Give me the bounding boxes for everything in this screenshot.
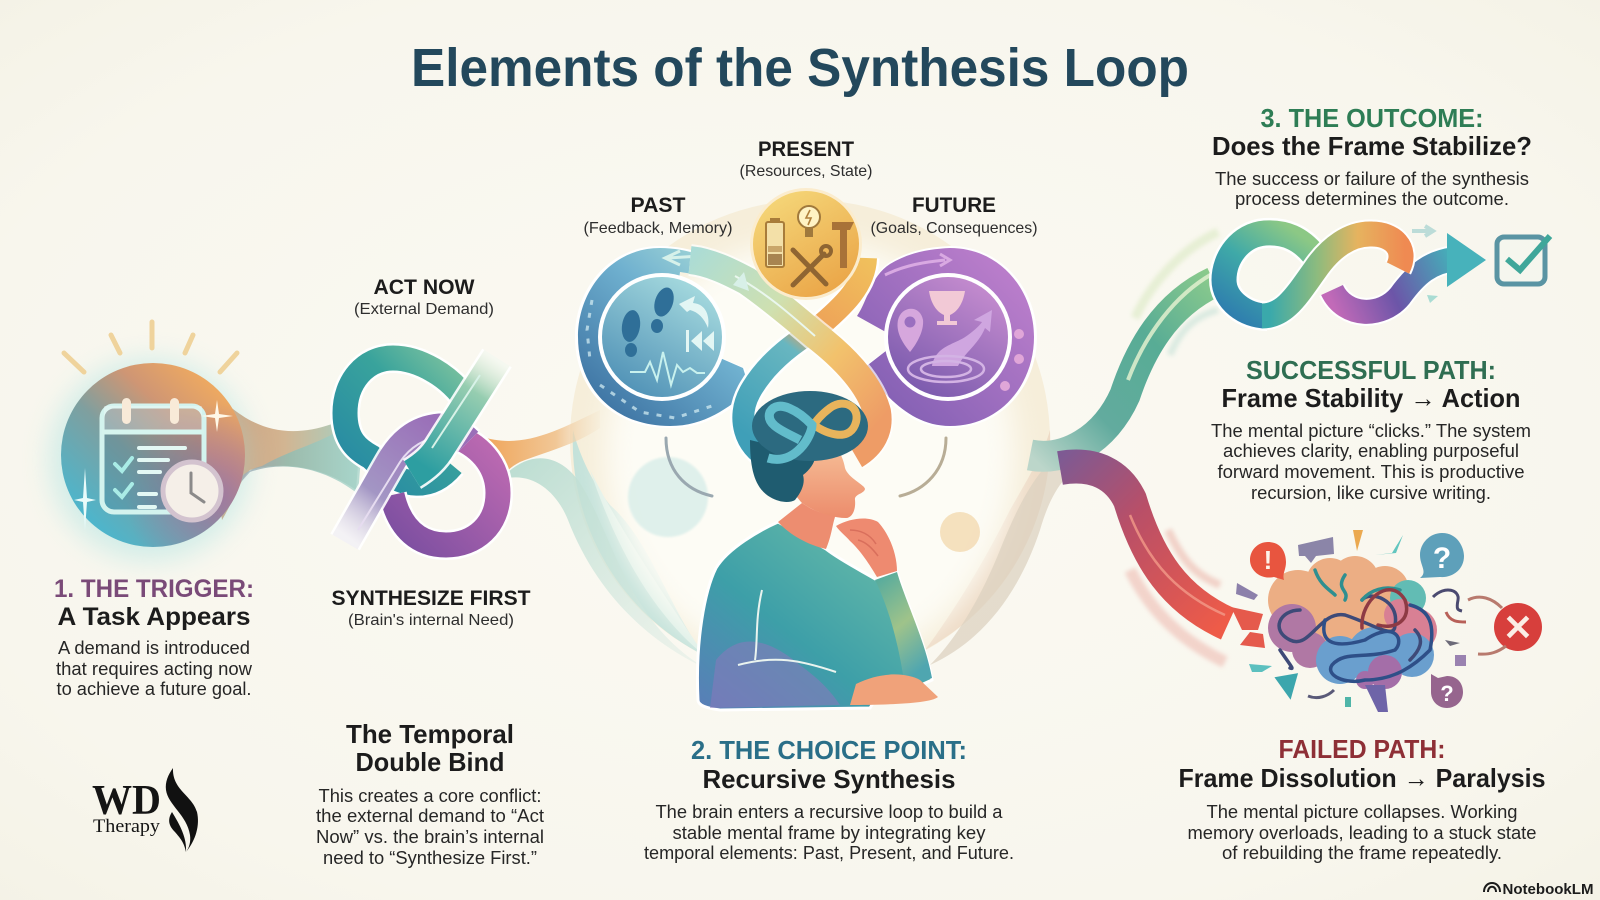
icon: present circle — [750, 188, 862, 300]
icon: crossed wrench and screwdriver — [793, 246, 831, 285]
panel: past circle — [575, 246, 752, 428]
label: past: PAST — [630, 194, 686, 217]
text block: temporal double bind: This creates a core conflict: — [318, 786, 542, 806]
icon: exclamation bubble — [1250, 542, 1286, 580]
icon: red X — [1433, 590, 1542, 654]
text block: choice point: Recursive Synthesis — [702, 764, 956, 794]
ribbon: failed path — [1060, 467, 1265, 662]
icon: question bubble purple: ? — [1440, 681, 1454, 706]
text block: temporal double bind: need to “Synthesize First.” — [323, 848, 537, 868]
icon: question bubble blue — [1420, 533, 1464, 578]
label: act now: ACT NOW — [374, 276, 475, 299]
fragments — [1231, 607, 1265, 648]
forearm sleeve — [875, 572, 932, 688]
icon: ripples — [908, 356, 984, 382]
icon: pulse line — [630, 352, 705, 385]
teal loop — [1224, 233, 1314, 316]
ribbon: past through crossing to head — [690, 260, 878, 455]
text block: failed path — [1178, 734, 1546, 863]
label: past — [584, 194, 732, 237]
teal loop — [345, 358, 468, 483]
text block: failed path: FAILED PATH: — [1278, 734, 1446, 764]
debris shards — [1236, 530, 1466, 707]
text block: the outcome: 3. THE OUTCOME: — [1260, 103, 1484, 133]
text block: failed path: The mental picture collapses. Working — [1206, 802, 1518, 822]
green diagonal — [412, 358, 497, 474]
label: present: (Resources, State) — [740, 163, 872, 180]
label: future — [870, 194, 1038, 237]
checkbox — [1497, 236, 1550, 284]
hand at chin — [836, 519, 897, 577]
text block: the trigger — [54, 575, 254, 699]
logo: WD Therapy: Therapy — [93, 816, 161, 837]
icon: path arrow — [932, 310, 992, 366]
text block: temporal double bind: the external demand to “Act — [316, 806, 544, 826]
logo: WD Therapy — [92, 768, 198, 852]
hair — [750, 440, 815, 502]
text block: the trigger: A demand is introduced — [58, 638, 250, 658]
text block: the trigger: that requires acting now — [56, 659, 253, 679]
text block: choice point — [644, 735, 1014, 863]
text block: temporal double bind: Double Bind — [356, 747, 504, 777]
text block: the trigger: A Task Appears — [58, 603, 250, 631]
label: synthesize first: (Brain's internal Need) — [348, 612, 514, 629]
label: synthesize first — [332, 587, 531, 629]
label: present — [740, 138, 872, 180]
icon: question bubble blue: ? — [1433, 542, 1451, 575]
label: future: FUTURE — [912, 194, 996, 217]
text block: choice point: 2. THE CHOICE POINT: — [691, 735, 967, 765]
ribbon: blue to head, orange to present — [743, 258, 866, 458]
text block: successful path: SUCCESSFUL PATH: — [1246, 355, 1496, 385]
text block: the trigger: to achieve a future goal. — [56, 679, 252, 699]
icon: trigger circle with calendar — [50, 322, 250, 560]
arrow shaft and head — [1332, 259, 1455, 312]
torso — [697, 522, 932, 710]
text block: successful path: recursion, like cursive writing. — [1251, 483, 1491, 503]
icon: footprints — [620, 285, 677, 357]
head window with mini infinity — [752, 391, 868, 461]
label: present: PRESENT — [758, 138, 854, 161]
text block: failed path: of rebuilding the frame repeatedly. — [1222, 843, 1502, 863]
text block: choice point: The brain enters a recursive loop to build a — [656, 802, 1003, 822]
text block: the outcome: Does the Frame Stabilize? — [1212, 131, 1532, 161]
label: future: (Goals, Consequences) — [870, 220, 1038, 237]
text block: the outcome — [1212, 103, 1532, 209]
purple loop — [392, 436, 498, 545]
panel: future circle — [857, 246, 1037, 428]
label: act now: (External Demand) — [354, 301, 494, 318]
text block: temporal double bind — [316, 719, 544, 868]
label: synthesize first: SYNTHESIZE FIRST — [332, 587, 531, 610]
watermark: NotebookLM: NotebookLM — [1502, 881, 1594, 898]
text block: temporal double bind: Now” vs. the brain’s internal — [316, 827, 544, 847]
title: Elements of the Synthesis Loop — [411, 38, 1189, 98]
text block: the outcome: process determines the outcome. — [1235, 189, 1509, 209]
text block: successful path — [1211, 355, 1531, 503]
text block: choice point: stable mental frame by integrating key — [672, 823, 986, 843]
text block: successful path: The mental picture “clicks.” The system — [1211, 421, 1531, 441]
flow: trigger to knot — [205, 380, 362, 520]
neck and face — [778, 503, 836, 549]
text block: failed path: Frame Dissolution → Paralysis — [1178, 763, 1546, 793]
icon: red X: ✕ — [1503, 607, 1533, 648]
text block: successful path: Frame Stability → Action — [1222, 383, 1520, 413]
icon: battery — [766, 218, 784, 267]
icon: rewind — [679, 296, 714, 352]
text block: temporal double bind: The Temporal — [346, 719, 514, 749]
text block: the trigger: 1. THE TRIGGER: — [54, 575, 254, 603]
icon: hammer — [832, 222, 854, 268]
flow: centre to outcomes — [930, 440, 1090, 665]
text block: choice point: temporal elements: Past, Present, and Future. — [644, 843, 1014, 863]
text block: failed path: memory overloads, leading to a stuck state — [1188, 823, 1536, 843]
label: act now — [354, 276, 494, 318]
infinity: outcome loop — [1030, 226, 1550, 456]
brain tangled — [1268, 556, 1437, 712]
icon: map pin — [898, 309, 923, 352]
icon: light bulb — [798, 206, 820, 237]
text block: the outcome: The success or failure of the synthesis — [1215, 169, 1529, 189]
knot: temporal double bind — [345, 358, 498, 545]
icon: exclamation bubble: ! — [1264, 545, 1272, 575]
label: past: (Feedback, Memory) — [584, 220, 732, 237]
logo: WD Therapy: WD — [92, 778, 161, 824]
text block: successful path: forward movement. This is productive — [1218, 462, 1524, 482]
icon: trophy — [929, 291, 965, 325]
green arc — [1030, 282, 1214, 456]
person thinking — [697, 391, 938, 710]
icon: question bubble purple — [1431, 674, 1463, 708]
text block: successful path: achieves clarity, enabling purposeful — [1223, 441, 1519, 461]
flow: knot to centre — [480, 410, 705, 668]
central crossing and orange loop — [1262, 234, 1401, 316]
purple diagonal — [345, 428, 468, 542]
big disc behind person — [570, 200, 1050, 680]
hand on table — [850, 674, 938, 705]
